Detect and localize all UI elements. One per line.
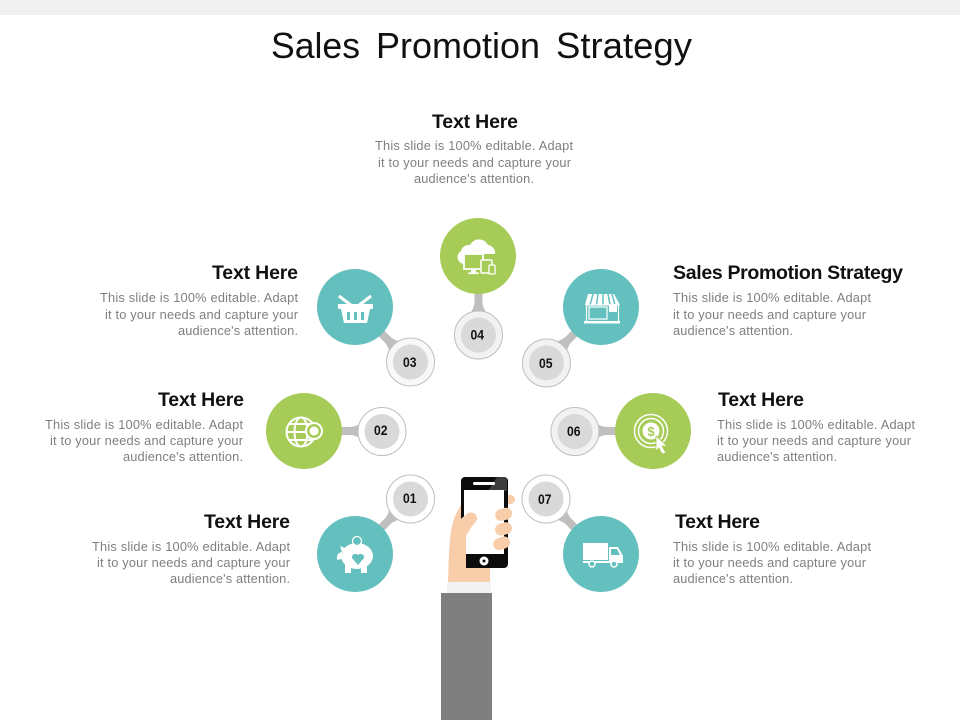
text block: middle right	[717, 389, 915, 464]
icon: basket	[338, 296, 373, 323]
node 04	[440, 218, 516, 294]
text block: lower right: Text Here	[675, 511, 760, 533]
node 05	[563, 269, 639, 345]
connector: 04	[468, 292, 488, 316]
text block: middle left: it to your needs and capture your	[50, 433, 244, 448]
text block: lower left	[92, 511, 291, 586]
speaker	[473, 482, 495, 485]
badge 06	[551, 408, 599, 456]
phone	[461, 477, 508, 568]
text block: middle left: Text Here	[158, 389, 244, 411]
text block: upper right: Sales Promotion Strategy	[673, 262, 903, 284]
phone highlight	[488, 477, 507, 491]
text block: middle left: audience's attention.	[123, 449, 243, 464]
text block: upper right: it to your needs and capture your	[673, 307, 867, 322]
node 02	[266, 393, 342, 469]
text block: lower right: audience's attention.	[673, 571, 793, 586]
text block: top: audience's attention.	[414, 171, 534, 186]
text block: upper left: it to your needs and capture your	[105, 307, 299, 322]
palm over phone	[450, 522, 490, 582]
text block: middle left	[45, 389, 244, 464]
badge 06: 06	[567, 423, 581, 439]
connector: 01	[373, 505, 404, 536]
badge 01: 01	[403, 490, 417, 506]
text block: top: Text Here	[432, 111, 518, 133]
text block: top: it to your needs and capture your	[378, 155, 572, 170]
node 06	[615, 393, 691, 469]
text block: middle right: This slide is 100% editable. Adapt	[717, 417, 915, 432]
badge 02	[358, 408, 406, 456]
title	[271, 25, 693, 66]
fingers	[494, 506, 513, 522]
badge 05: 05	[539, 355, 553, 371]
icon: delivery truck	[583, 543, 623, 567]
text block: upper left	[100, 262, 299, 338]
text block: middle left: This slide is 100% editable. Adapt	[45, 417, 243, 432]
node 07	[563, 516, 639, 592]
connector: 02	[340, 421, 364, 441]
title: Promotion	[376, 25, 540, 66]
icon: storefront	[584, 294, 620, 324]
icon: piggy bank	[337, 536, 373, 573]
finger behind phone	[503, 495, 515, 504]
text block: middle right: it to your needs and capture your	[717, 433, 912, 448]
text block: lower left: audience's attention.	[170, 571, 290, 586]
badge 04	[454, 311, 502, 359]
text block: middle right: audience's attention.	[717, 449, 837, 464]
text block: lower right: This slide is 100% editable. Adapt	[673, 539, 871, 554]
icon: globe and target	[286, 418, 322, 446]
icon: cloud and devices	[458, 239, 495, 274]
title: Sales	[271, 25, 360, 66]
badge 07	[522, 475, 570, 523]
text block: lower left: it to your needs and capture your	[97, 555, 291, 570]
hand holding phone	[441, 477, 515, 720]
node 03	[317, 269, 393, 345]
icon: target and cursor: $	[647, 424, 655, 439]
node 01	[317, 516, 393, 592]
cuff	[447, 582, 491, 593]
text block: middle right: Text Here	[718, 389, 804, 411]
screen	[464, 490, 504, 554]
text block: top: This slide is 100% editable. Adapt	[375, 138, 573, 153]
text block: upper left: audience's attention.	[178, 323, 298, 338]
text block: top	[375, 111, 573, 186]
badge 03: 03	[403, 354, 417, 370]
badge 02: 02	[374, 422, 388, 438]
title: Strategy	[556, 25, 693, 66]
badge 05	[522, 339, 570, 387]
hand	[448, 503, 490, 582]
connector: 03	[373, 325, 404, 356]
connector: 07	[552, 505, 583, 536]
text block: upper right: audience's attention.	[673, 323, 793, 338]
sleeve	[441, 593, 492, 720]
home button	[480, 556, 488, 566]
text block: upper right: This slide is 100% editable. Adapt	[673, 290, 871, 305]
text block: upper left: Text Here	[212, 262, 298, 284]
text block: lower left: Text Here	[204, 511, 290, 533]
connector: 05	[552, 325, 583, 356]
thumb	[455, 513, 477, 545]
text block: upper left: This slide is 100% editable. Adapt	[100, 290, 298, 305]
connector: 06	[593, 421, 617, 441]
badge 07: 07	[538, 491, 552, 507]
text block: lower right: it to your needs and capture your	[673, 555, 867, 570]
text block: upper right	[673, 262, 903, 338]
badge 04: 04	[470, 326, 484, 342]
badge 01	[386, 475, 434, 523]
text block: lower left: This slide is 100% editable. Adapt	[92, 539, 290, 554]
text block: lower right	[673, 511, 871, 586]
badge 03	[386, 338, 434, 386]
